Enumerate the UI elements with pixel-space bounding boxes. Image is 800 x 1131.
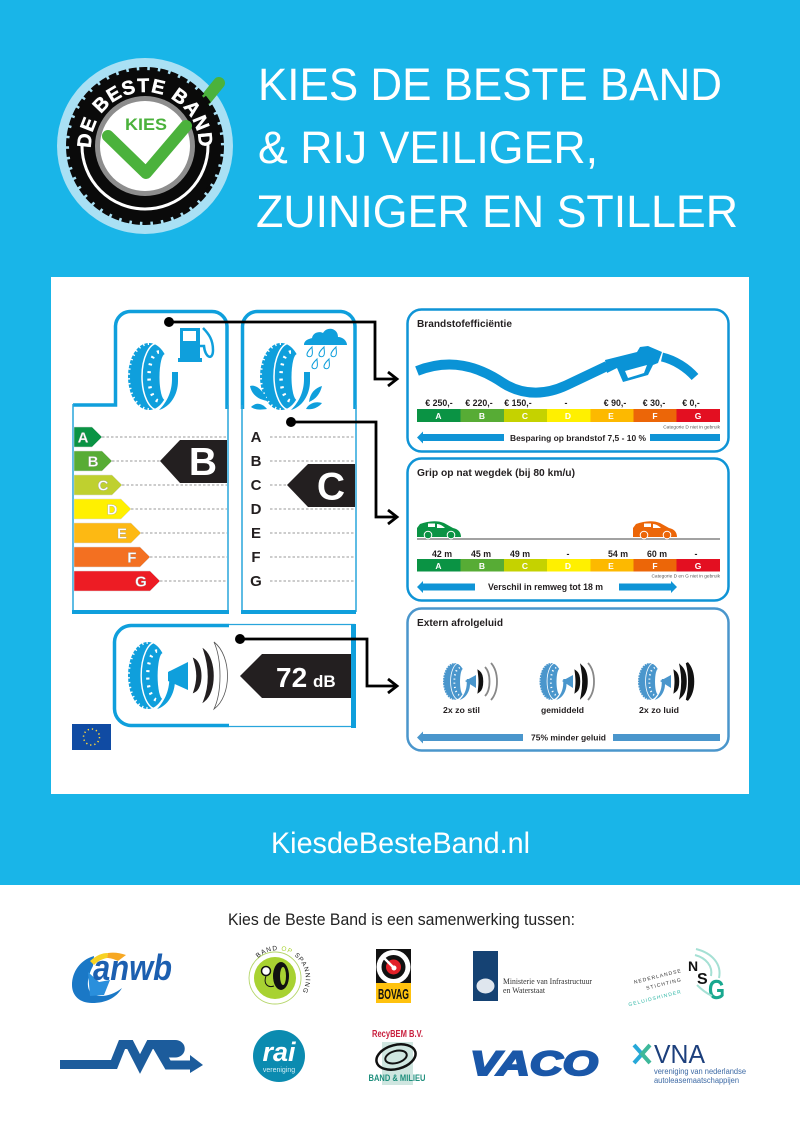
partner intro: Kies de Beste Band is een samenwerking tussen: [228,911,575,929]
scale letters: D [251,501,262,518]
logo: RAI Vereniging [253,1030,305,1082]
title: & RIJ VEILIGER, [258,122,598,173]
logo: VNA: vereniging van nederlandse [654,1067,747,1076]
arrow: fuel saving [417,432,720,444]
scale letters: D [107,502,118,518]
road [417,538,720,540]
heading: Brandstofefficiëntie [417,318,512,330]
panel: noise label [114,624,356,728]
logo: Ministerie van Infrastructuur en Waterstaat: Ministerie van Infrastructuur [503,976,592,986]
rating tag C [287,464,355,508]
scale letters: C [98,478,109,494]
noise labels: gemiddeld [541,705,584,715]
icon: average tyre [540,663,594,700]
heading: Grip op nat wegdek (bij 80 km/u) [417,467,575,479]
scale letters: A [78,430,89,446]
colour scale bar: B [479,561,485,571]
icon: orange car [633,521,677,539]
logo: BOVAG: BOVAG [378,986,409,1003]
distance labels: 54 m [608,549,628,559]
rating tag B [160,440,227,484]
scale letters: F [127,550,137,566]
logo: NSG: NEDERLANDSE [633,968,682,986]
logo: De Beste Band tyre with check [57,58,233,234]
price labels: € 30,- [643,398,665,408]
colour scale bar: F [652,561,658,571]
panel: fuel label [72,312,229,614]
logo: VNA: VNA [654,1039,706,1069]
logo: RecyBEM Band & Milieu [368,1029,426,1085]
logo: ANWB [72,947,172,1003]
scale letters: A [251,429,262,446]
rating tag B: B [189,441,217,484]
logo: NR [60,1044,203,1073]
scale letters: B [251,453,262,470]
icon: tyre with sound [128,642,228,709]
colour scale bar: G [695,561,702,571]
colour scale bar: E [608,411,614,421]
logo: Band op Spanning: BAND OP SPANNING [256,946,310,993]
title: ZUINIGER EN STILLER [256,186,738,237]
colour scale bar [417,409,720,422]
price labels: € 90,- [604,398,626,408]
scale letters: G [250,573,262,590]
price labels: € 220,- [465,398,493,408]
scale letters: E [251,525,261,542]
logo: NSG: GELUIDSHINDER [628,989,682,1008]
energy scale arrows A to G [74,427,160,591]
distance labels [432,549,698,559]
rating tag C: C [317,466,345,508]
price labels: € 250,- [425,398,453,408]
icon: quiet tyre [443,663,497,700]
logo: RecyBEM Band & Milieu: RecyBEM B.V. [372,1029,423,1040]
colour scale bar: C [522,411,528,421]
footnote: Categorie D en G niet in gebruik [651,574,721,580]
logo: NSG: S [697,971,708,988]
logo: NSG: G [708,974,725,1005]
logo: VACO: VACO [470,1045,598,1083]
logo: NSG [628,949,725,1008]
noise labels: 2x zo luid [639,705,679,715]
logo: RAI Vereniging: rai [262,1037,296,1067]
title: KIES DE BESTE BAND [258,59,722,110]
logo: RAI Vereniging: vereniging [263,1067,295,1074]
noise labels [443,705,679,715]
icon: EU flag [72,724,111,750]
colour scale bar: C [522,561,528,571]
arrow: grip label to grip panel [286,417,397,524]
colour scale bar: F [652,411,658,421]
colour scale bar: E [608,561,614,571]
logo: Ministerie van Infrastructuur en Waterstaat [473,951,592,1001]
icon: loud tyre [638,663,693,700]
panel: white label area [51,277,749,794]
illustration: fuel hose and nozzle [417,346,695,393]
arrow: noise label to noise panel [235,634,397,693]
panel: wet grip label [241,312,356,614]
distance labels: 60 m [647,549,667,559]
background: blue poster [0,0,800,885]
arrow: less noise [417,732,720,744]
panel: external noise [408,608,728,750]
arrow caption: 75% minder geluid [531,732,606,742]
distance labels: - [567,549,570,559]
icon: rain cloud [304,329,347,369]
scale letters [250,429,262,590]
arrow: fuel label to fuel panel [164,317,397,386]
logo: NSG: STICHTING [646,977,682,992]
panel: fuel efficiency [408,310,728,452]
icon: tyre [128,343,180,410]
logo: NSG: N [688,958,698,974]
scale letters: E [117,526,127,542]
price labels: - [565,398,568,408]
panel: wet grip [408,458,728,600]
distance labels: 49 m [510,549,530,559]
website: KiesdeBesteBand.nl [271,827,530,860]
arrow caption: Verschil in remweg tot 18 m [488,582,603,592]
scale letters [78,430,147,590]
price labels: € 0,- [682,398,700,408]
colour scale bar [417,559,720,572]
arrow caption: Besparing op brandstof 7,5 - 10 % [510,433,646,443]
logo: VNA: autoleasemaatschappijen [654,1076,739,1085]
colour scale bar: B [479,411,485,421]
logo: ANWB: anwb [93,947,172,988]
distance labels: - [695,549,698,559]
scale letters: F [251,549,261,566]
icon: splash [250,386,322,410]
title [256,59,738,237]
footer background [0,885,800,1131]
heading: Extern afrolgeluid [417,617,503,629]
colour scale bar: G [695,411,702,421]
logo: De Beste Band tyre with check: KIES [125,115,167,134]
colour scale bar: D [565,411,571,421]
rating tag 72 dB [240,654,351,698]
distance labels: 45 m [471,549,491,559]
scale letters: G [135,574,147,590]
scale letters: B [88,454,99,470]
noise labels: 2x zo stil [443,705,480,715]
logo: BOVAG [376,949,411,1003]
scale letters: C [251,477,262,494]
icon: fuel pump [178,328,213,362]
arrows: braking distance [417,581,677,593]
rating tag 72 dB: 72 [276,662,307,693]
icon: green car [417,521,461,539]
price labels [425,398,700,408]
colour scale bar: A [435,561,442,571]
logo: De Beste Band tyre with check: DE BESTE BAND [77,78,212,148]
rating tag 72 dB: dB [313,672,336,691]
logo: Ministerie van Infrastructuur en Waterstaat: en Waterstaat [503,985,546,995]
colour scale bar: D [565,561,571,571]
price labels: € 150,- [504,398,532,408]
footnote: Categorie D niet in gebruik [663,424,721,430]
logo: RecyBEM Band & Milieu: BAND & MILIEU [368,1073,426,1083]
icon: tyre [260,343,312,410]
logo: VNA [634,1039,747,1085]
distance labels: 42 m [432,549,452,559]
colour scale bar: A [435,411,442,421]
